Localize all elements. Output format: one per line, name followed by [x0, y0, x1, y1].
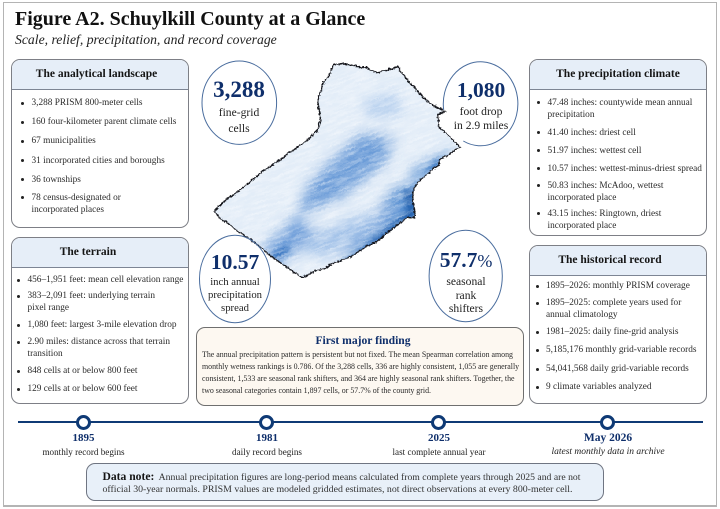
list: terrain items — [17, 275, 184, 394]
list: terrain items: transition — [28, 349, 63, 359]
list: analytical landscape items — [21, 98, 176, 214]
stat: 10.57 inch annual precipitation spread — [208, 250, 262, 314]
milestone: 1981: 1981 — [256, 432, 278, 444]
list: historical record items: 1895–2026: monthly PRISM coverage — [546, 281, 690, 291]
heading: the precipitation climate — [530, 60, 706, 90]
list: precipitation items: 43.15 inches: Ringtown, driest — [548, 208, 661, 218]
heading: the analytical landscape — [12, 60, 188, 90]
heading: the historical record: The historical record — [558, 254, 662, 266]
panel: the precipitation climate — [529, 59, 707, 236]
stat: 57.7% seasonal rank shifters: seasonal — [446, 275, 486, 288]
list: analytical landscape items: 160 four-kilometer parent climate cells — [32, 117, 176, 127]
milestone: 2025: 2025 — [428, 432, 450, 444]
list: historical record items: annual climatology — [546, 310, 618, 320]
stat: 57.7% seasonal rank shifters — [440, 248, 492, 315]
list: historical record items — [536, 281, 697, 392]
milestone: May 2026: May 2026 — [584, 432, 632, 444]
list: historical record items: 1895–2025: complete years used for — [546, 298, 681, 308]
list: precipitation items: 51.97 inches: wettest cell — [548, 146, 641, 156]
list: analytical landscape items: 3,288 PRISM 800-meter cells — [32, 98, 143, 108]
data note: official 30-year normals. PRISM values are modeled gridded estimates, not direct observations at every 800-meter cell. — [102, 484, 572, 495]
stat: 10.57 inch annual precipitation spread: 10.57 — [211, 250, 259, 274]
list: analytical landscape items: 78 census-designated or — [32, 192, 121, 202]
finding text — [202, 350, 520, 395]
list: historical record items: 1981–2025: daily fine-grid analysis — [546, 327, 678, 337]
heading: first major finding: First major finding — [315, 334, 411, 346]
list: historical record items: 5,185,176 monthly grid-variable records — [546, 345, 697, 355]
heading: the terrain — [12, 238, 188, 268]
list: analytical landscape items: 36 townships — [32, 174, 81, 184]
list: precipitation items — [537, 98, 702, 230]
heading: the analytical landscape: The analytical landscape — [36, 68, 157, 80]
list: historical record items: 54,041,568 daily grid-variable records — [546, 364, 689, 374]
subtitle: Scale, relief, precipitation, and record coverage — [15, 32, 277, 47]
data note: Data note: Annual precipitation figures are long-period means calculated from complete years through 2025 and are not — [102, 470, 580, 483]
data note — [86, 463, 604, 501]
stat: 3,288 fine-grid cells: 3,288 — [213, 77, 265, 102]
list: terrain items: 1,080 feet: largest 3-mile elevation drop — [28, 320, 177, 330]
milestone: May 2026 — [551, 415, 665, 456]
list: terrain items: 383–2,091 feet: underlying terrain — [28, 291, 155, 301]
stat: 3,288 fine-grid cells: cells — [228, 122, 250, 134]
milestone: May 2026: latest monthly data in archive — [551, 446, 665, 456]
milestone: 1895: monthly record begins — [42, 446, 125, 456]
stat: 3,288 fine-grid cells — [213, 77, 265, 134]
list: terrain items: 848 cells at or below 800 feet — [28, 366, 137, 376]
stat: 57.7% seasonal rank shifters: 57.7% — [440, 248, 492, 272]
heading: the precipitation climate: The precipitation climate — [556, 68, 680, 80]
list: precipitation items: incorporated place — [548, 220, 616, 230]
finding text: consistent, 1,533 are seasonal rank shifters, and 364 are highly seasonal rank shifters. Together, the — [202, 374, 515, 383]
stat: 1,080 foot drop in 2.9 miles: foot drop — [460, 105, 502, 118]
list: precipitation items: incorporated place — [548, 192, 616, 202]
list: precipitation items: 50.83 inches: McAdoo, wettest — [548, 180, 663, 190]
milestone: 1981 — [232, 415, 302, 457]
finding text: The annual precipitation pattern is persistent but not fixed. The mean Spearman correlation among — [202, 350, 513, 359]
list: analytical landscape items: 67 municipalities — [32, 136, 96, 146]
list: precipitation items: 10.57 inches: wettest-minus-driest spread — [548, 164, 702, 174]
map: county precipitation relief — [214, 62, 462, 278]
list: precipitation items: 47.48 inches: countywide mean annual — [548, 98, 692, 108]
milestone: 1895 — [42, 415, 125, 457]
list: analytical landscape items: incorporated places — [32, 204, 104, 214]
list: analytical landscape items: 31 incorporated cities and boroughs — [32, 156, 165, 166]
stat: 1,080 foot drop in 2.9 miles — [454, 78, 508, 132]
list: terrain items: 456–1,951 feet: mean cell elevation range — [28, 275, 183, 285]
list: precipitation items: 41.40 inches: driest cell — [548, 128, 636, 138]
milestone: 1895: 1895 — [72, 432, 94, 444]
stat: 10.57 inch annual precipitation spread: spread — [221, 302, 249, 314]
milestone: 2025: last complete annual year — [393, 446, 485, 456]
milestone: 1981: daily record begins — [232, 446, 302, 456]
timeline axis — [18, 421, 703, 423]
milestone: 2025 — [392, 415, 486, 457]
stat: 1,080 foot drop in 2.9 miles: in 2.9 miles — [454, 119, 508, 132]
panel: the terrain — [11, 237, 189, 404]
panel: the analytical landscape — [11, 59, 189, 228]
finding text: monthly wetness rankings is 0.786. Of the 3,288 cells, 336 are highly consistent, 1,055 are generally — [202, 362, 519, 371]
panel: the historical record — [529, 245, 707, 404]
list: historical record items: 9 climate variables analyzed — [546, 382, 652, 392]
stat: 10.57 inch annual precipitation spread: inch annual — [210, 276, 260, 288]
heading: the historical record — [530, 246, 706, 276]
callout: first major finding — [196, 327, 524, 406]
timeline — [18, 415, 703, 457]
list: terrain items: 2.90 miles: distance across that terrain — [28, 337, 170, 347]
list: precipitation items: precipitation — [548, 110, 594, 120]
stat: 10.57 inch annual precipitation spread: precipitation — [208, 289, 262, 301]
finding text: two seasonal categories contain 1,897 cells, or 57.7% of the county grid. — [202, 386, 431, 394]
stat: 1,080 foot drop in 2.9 miles: 1,080 — [457, 78, 505, 102]
heading: the terrain: The terrain — [60, 246, 116, 258]
stat: 57.7% seasonal rank shifters: shifters — [449, 302, 483, 315]
stat: 3,288 fine-grid cells: fine-grid — [219, 106, 259, 119]
title: Figure A2. Schuylkill County at a Glance — [15, 8, 365, 30]
list: terrain items: pixel range — [28, 303, 69, 313]
list: terrain items: 129 cells at or below 600 feet — [28, 384, 137, 394]
stat: 57.7% seasonal rank shifters: rank — [456, 288, 476, 302]
